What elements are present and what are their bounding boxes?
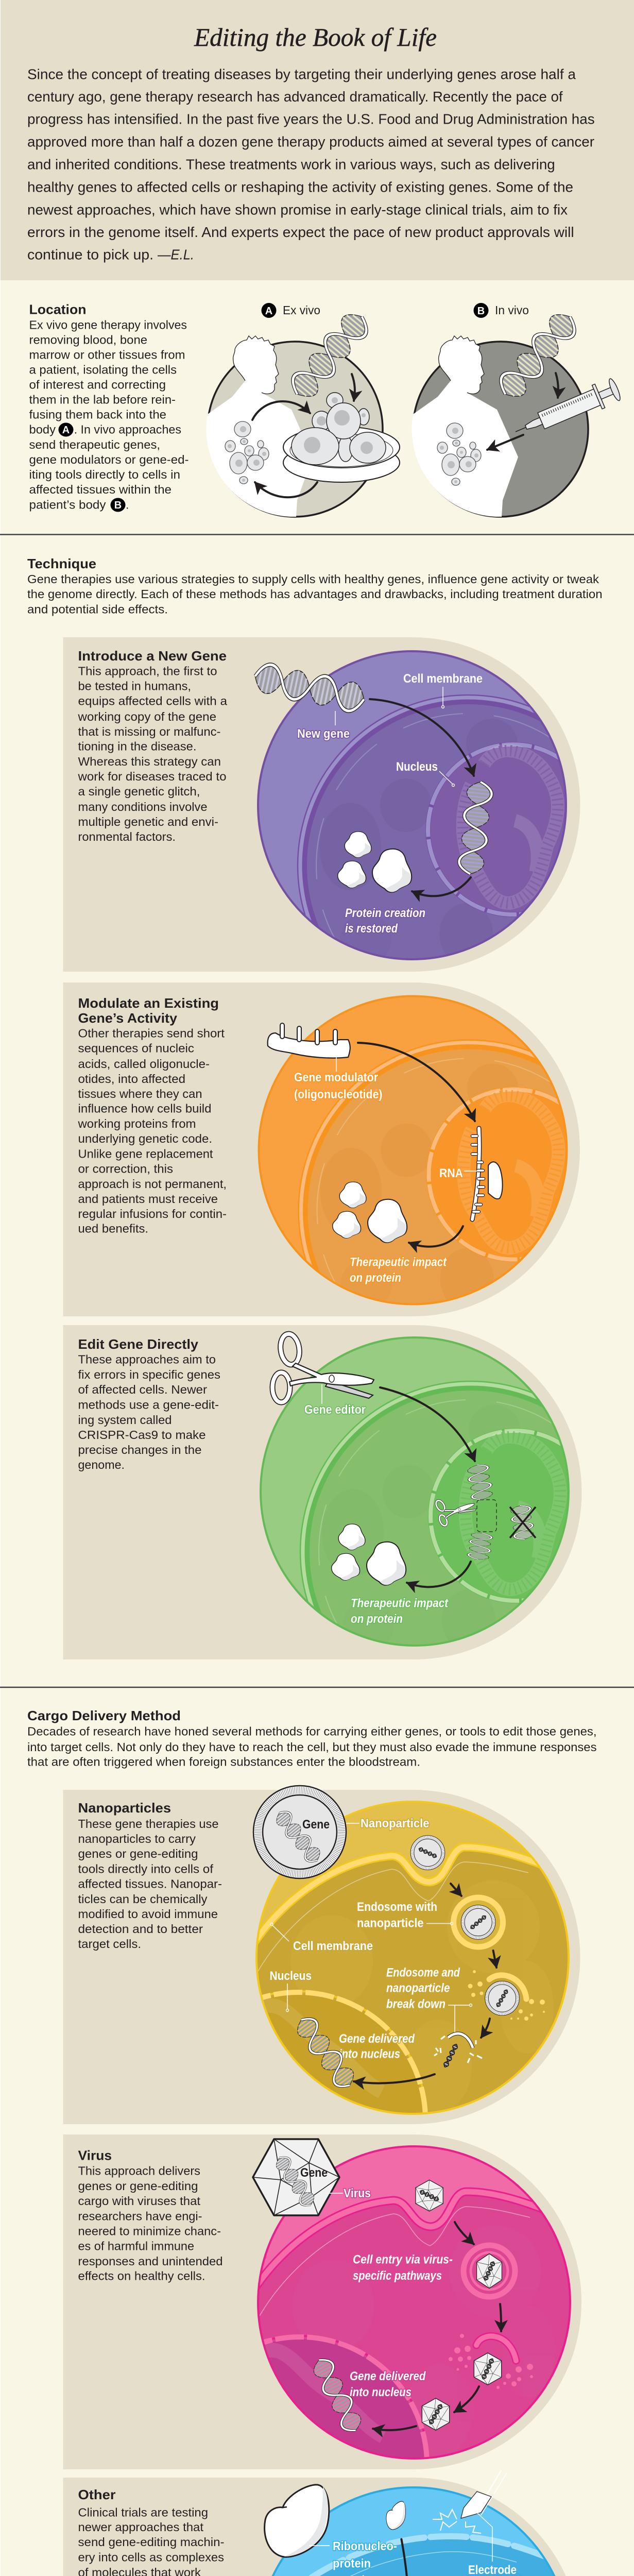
panel: edit gene directly (63, 1325, 634, 1722)
icon: petri dish with cells (283, 393, 400, 482)
body text (78, 1353, 220, 1471)
heading: Edit Gene Directly (78, 1336, 199, 1352)
label: new gene: New gene (297, 727, 350, 741)
body text: ued benefits. (78, 1222, 148, 1235)
text: technique intro: and potential side effects. (27, 603, 168, 616)
icon: proteins (338, 832, 412, 892)
label: gene editor (304, 1384, 366, 1417)
label: ex vivo (262, 303, 320, 318)
cell diagram (259, 996, 634, 1381)
heading: Other (78, 2487, 115, 2502)
text: location description: iting tools directly to cells in (29, 468, 180, 481)
text: location description: body (29, 422, 56, 436)
body text: working copy of the gene (77, 710, 216, 723)
icon: nanoparticle with gene: Gene (302, 1818, 330, 1832)
label: virus (325, 2187, 371, 2200)
label: gene delivered: into nucleus (339, 2047, 400, 2061)
icon: ribonucleoprotein complex (265, 2485, 329, 2557)
label: electrode (468, 2513, 517, 2576)
text: location description: gene modulators or gene-ed- (29, 453, 189, 466)
heading (78, 995, 219, 1026)
text: location description: patient’s body (29, 498, 106, 511)
body text: be tested in humans, (78, 679, 191, 692)
label: in vivo: B (477, 306, 485, 317)
heading: Modulate an Existing (78, 995, 219, 1011)
text: location description: fusing them back into the (29, 408, 166, 421)
heading: Introduce a New Gene (78, 648, 227, 664)
arrow: endosome down (500, 2304, 501, 2331)
body text: newer approaches that (78, 2520, 204, 2534)
body text: influence how cells build (78, 1101, 211, 1115)
icon: virus with gene (253, 2139, 339, 2215)
cell diagram (170, 1786, 582, 2248)
body text: es of harmful immune (78, 2239, 194, 2252)
label: rna (439, 1166, 478, 1180)
body text: Other therapies send short (78, 1026, 225, 1040)
label: therapeutic impact (351, 1596, 449, 1626)
icon: small scissors (432, 1487, 478, 1527)
body text (78, 2506, 225, 2576)
icon: electrode (433, 2470, 507, 2533)
body text: target cells. (78, 1937, 141, 1951)
label: cell membrane: Cell membrane (403, 672, 483, 686)
body text (77, 1026, 227, 1235)
body text: fix errors in specific genes (78, 1368, 220, 1381)
body text: that is missing or malfunc- (78, 725, 220, 738)
body text: Whereas this strategy can (78, 755, 221, 768)
body text: genome. (78, 1458, 125, 1471)
body text: affected tissues. Nanopar- (78, 1877, 222, 1891)
illustration: ex vivo (206, 308, 400, 517)
body text: detection and to better (78, 1922, 203, 1936)
label: therapeutic impact: Therapeutic impact (351, 1596, 449, 1611)
body text: methods use a gene-edit- (78, 1398, 219, 1412)
body text: researchers have engi- (78, 2209, 202, 2223)
label: new gene (297, 711, 350, 741)
label: gene editor: Gene editor (304, 1403, 366, 1417)
arrow: entering (455, 2222, 474, 2244)
body text: approach is not permanent, (78, 1177, 227, 1191)
intro text: continue to pick up. (27, 246, 153, 263)
icon: gene being edited (467, 1463, 496, 1561)
label: therapeutic impact (350, 1255, 447, 1285)
label: nanoparticle: Nanoparticle (361, 1817, 430, 1831)
intro text: —E.L. (157, 246, 194, 263)
intro text: Since the concept of treating diseases by targeting their underlying genes arose half a (27, 66, 576, 82)
label: ex vivo: A (265, 306, 272, 317)
icon: gene in nucleus (310, 2355, 365, 2435)
text: cargo intro: that are often triggered when foreign substances enter the bloodstream. (27, 1755, 420, 1768)
label: cell entry: Cell entry via virus- (353, 2252, 453, 2267)
illustration: in vivo (412, 308, 623, 517)
label: rnp: Ribonucleo- (333, 2539, 397, 2553)
body text: neered to minimize chanc- (78, 2225, 221, 2238)
icon: gene editor scissors (272, 1333, 374, 1402)
body text: ronmental factors. (78, 830, 176, 843)
body text: Clinical trials are testing (78, 2506, 208, 2519)
panel: location (29, 302, 623, 517)
heading: Nanoparticles (78, 1800, 171, 1816)
label: endosome and nanoparticle break down (386, 1966, 472, 2032)
icon: released gene (434, 2033, 482, 2068)
label: endosome and nanoparticle break down: nanoparticle (386, 1981, 450, 1995)
title: Editing the Book of Life (194, 23, 437, 52)
label: protein creation: is restored (345, 922, 398, 936)
divider (0, 534, 634, 535)
label: therapeutic impact: on protein (351, 1612, 403, 1626)
label: rna: RNA (439, 1166, 463, 1180)
text: location description: . (126, 498, 129, 511)
body text: ing system called (78, 1413, 172, 1427)
label: endosome with nanoparticle: Endosome with (357, 1900, 437, 1914)
intro text: newest approaches, which have shown promise in early-stage clinical trials, aim to fix (27, 202, 568, 217)
label: gene modulator: (oligonucleotide) (294, 1088, 382, 1101)
label: rnp: protein (333, 2556, 371, 2571)
panel: virus (63, 2134, 584, 2576)
panel: nanoparticles (63, 1786, 582, 2248)
panel: other (63, 2470, 584, 2576)
text: location description: affected tissues within the (29, 483, 172, 496)
text: location description: a patient, isolating the cells (29, 363, 177, 376)
label: in vivo (474, 303, 529, 318)
label: cell membrane: Cell membrane (293, 1939, 373, 1953)
icon: rna with modulator (472, 1128, 503, 1219)
label: cell entry: specific pathways (353, 2269, 442, 2283)
arrow: into nucleus (373, 2426, 416, 2430)
label: virus: Virus (344, 2187, 371, 2200)
body text: ticles can be chemically (78, 1892, 208, 1906)
body text: many conditions involve (78, 800, 207, 814)
intro text: errors in the genome itself. And experts expect the pace of new product approvals will (27, 224, 574, 240)
text: cargo intro (27, 1725, 596, 1768)
intro text: century ago, gene therapy research has advanced dramatically. Recently the pace of (27, 89, 563, 105)
icon: removed gene (510, 1504, 536, 1540)
label: nucleus (270, 1969, 312, 2011)
arrow: to protein (409, 1226, 463, 1247)
label: gene modulator: Gene modulator (294, 1071, 378, 1084)
body text: Unlike gene replacement (78, 1147, 213, 1160)
arrow: dna to syringe (556, 373, 558, 398)
section: technique (27, 556, 603, 616)
icon: small rnp outside (386, 2501, 406, 2530)
body text: work for diseases traced to (77, 770, 226, 783)
body text (77, 665, 227, 843)
body text: These approaches aim to (78, 1353, 216, 1366)
heading: cargo delivery method: Cargo Delivery Method (27, 1708, 181, 1723)
icon: proteins (333, 1182, 407, 1243)
body text: ery into cells as complexes (78, 2550, 224, 2564)
label: therapeutic impact: on protein (350, 1271, 401, 1285)
text: location description: Ex vivo gene therapy involves (29, 318, 187, 332)
label: nucleus: Nucleus (270, 1969, 312, 1983)
label: cell entry (353, 2252, 453, 2283)
arrow: entering (451, 1884, 461, 1896)
cell diagram (264, 2470, 555, 2576)
body text (78, 1817, 222, 1951)
icon: endosome with nanoparticle (454, 1897, 503, 1947)
body text: These gene therapies use (78, 1817, 218, 1831)
header panel (1, 0, 634, 280)
label: gene delivered (339, 2032, 415, 2061)
heading: technique: Technique (27, 556, 96, 571)
body text: modified to avoid immune (78, 1907, 218, 1921)
icon: gene modulator (268, 1023, 350, 1058)
text: location description: them in the lab before rein- (29, 393, 176, 406)
heading: Virus (78, 2147, 112, 2163)
label: gene delivered: Gene delivered (350, 2369, 426, 2383)
arrow: into nucleus (354, 2074, 435, 2083)
icon: gene in nucleus (293, 2013, 358, 2092)
body text: genes or gene-editing (78, 2179, 198, 2193)
text: location description: B (114, 500, 122, 511)
arrow: into nucleus (370, 699, 474, 776)
arrow: injection (487, 435, 523, 450)
icon: syringe (510, 377, 623, 444)
arrow: breakdown down (481, 2019, 490, 2038)
intro text: healthy genes to affected cells or reshaping the activity of existing genes. Some of the (27, 179, 573, 195)
arrow: breakdown down (454, 2386, 479, 2412)
body text: otides, into affected (78, 1072, 185, 1086)
icon: endosome breaking down (449, 2334, 533, 2389)
body text: responses and unintended (78, 2255, 222, 2268)
cell diagram (261, 1333, 634, 1722)
icon: new gene (252, 662, 367, 714)
label: protein creation (345, 906, 425, 936)
cell diagram (252, 651, 634, 1036)
body text: CRISPR-Cas9 to make (78, 1428, 206, 1442)
text: technique intro: the genome directly. Each of these methods has advantages and drawbacks, including treatment duration (27, 587, 603, 601)
icon: dna strand (286, 308, 373, 403)
section: cargo delivery method (27, 1708, 596, 1768)
body text: or correction, this (78, 1162, 173, 1176)
body text: underlying genetic code. (78, 1132, 212, 1145)
label: protein creation: Protein creation (345, 906, 425, 920)
divider (0, 1687, 634, 1688)
text: technique intro: Gene therapies use various strategies to supply cells with healthy genes, influence gene activity or tweak (27, 572, 599, 586)
label: gene delivered: Gene delivered (339, 2032, 415, 2046)
label: gene delivered (350, 2369, 426, 2399)
arrow: into nucleus (358, 1043, 475, 1121)
label: endosome and nanoparticle break down: Endosome and (386, 1966, 460, 1979)
icon: endosome with virus (464, 2245, 515, 2297)
label: endosome and nanoparticle break down: break down (386, 1997, 445, 2011)
arrow: endosome down (493, 1951, 496, 1968)
text: location description: A (62, 425, 70, 436)
body text: tissues where they can (78, 1087, 202, 1100)
text: location description: send therapeutic genes, (29, 438, 160, 451)
label: endosome with nanoparticle (357, 1900, 453, 1930)
body text: a single genetic glitch, (78, 785, 200, 798)
body text: precise changes in the (78, 1443, 202, 1456)
body text (78, 2164, 222, 2282)
body text: This approach, the first to (78, 665, 217, 678)
body text: cargo with viruses that (78, 2194, 201, 2208)
label: ex vivo: Ex vivo (283, 303, 320, 317)
body text: and patients must receive (78, 1192, 218, 1206)
body text: multiple genetic and envi- (78, 815, 218, 828)
label: nucleus: Nucleus (396, 760, 438, 774)
body text: genes or gene-editing (78, 1847, 198, 1860)
text: location description: of interest and correcting (29, 378, 166, 392)
label: gene delivered: into nucleus (350, 2385, 412, 2399)
icon: gene in nucleus (458, 781, 493, 875)
text: technique intro (27, 572, 603, 616)
icon: virus with gene: Gene (300, 2166, 328, 2180)
icon: endosome breaking down (468, 1970, 545, 2021)
body text: tools directly into cells of (78, 1862, 214, 1875)
label: gene modulator (294, 1056, 382, 1101)
icon: dna strand (494, 308, 581, 403)
label: endosome with nanoparticle: nanoparticle (357, 1917, 423, 1930)
text: location description: marrow or other tissues from (29, 348, 185, 362)
label: rnp (309, 2539, 397, 2576)
icon: virus entering (416, 2180, 443, 2211)
body text: send gene-editing machin- (78, 2535, 225, 2549)
body text: of affected cells. Newer (78, 1383, 207, 1396)
label: cell membrane (270, 1923, 373, 1953)
panel: introduce a new gene (63, 637, 634, 1036)
icon: nanoparticle with gene (253, 1786, 346, 1878)
icon: proteins (332, 1524, 406, 1585)
arrow: dish to body (255, 482, 317, 497)
arrow: to protein (412, 877, 471, 896)
body text: This approach delivers (78, 2164, 200, 2177)
icon: nanoparticle entering (410, 1836, 445, 1870)
icon: virus at nucleus (422, 2398, 450, 2430)
label: in vivo: In vivo (495, 303, 529, 317)
body text: effects on healthy cells. (78, 2269, 205, 2282)
body text: tioning in the disease. (78, 740, 197, 753)
arrow: dna to dish (352, 374, 355, 401)
text: cargo intro: Decades of research have honed several methods for carrying either genes, or tools to edit those genes, (27, 1725, 596, 1738)
intro text: and inherited conditions. These treatments work in various ways, such as delivering (27, 157, 555, 172)
heading: Gene’s Activity (78, 1010, 178, 1026)
label: therapeutic impact: Therapeutic impact (350, 1255, 447, 1269)
heading: location: Location (29, 302, 87, 317)
text: location description: removing blood, bone (29, 333, 147, 346)
body text: nanoparticles to carry (78, 1832, 196, 1845)
label: nucleus (396, 760, 454, 786)
text: location description (29, 318, 189, 512)
panel: modulate an existing gene's activity (63, 982, 634, 1381)
body text: equips affected cells with a (78, 694, 227, 708)
arrow: body to dish (252, 401, 310, 420)
text: location description: . In vivo approaches (74, 422, 181, 436)
cell diagram (172, 2139, 584, 2576)
arrow: into nucleus (380, 1387, 475, 1461)
body text: acids, called oligonucle- (78, 1057, 210, 1071)
body text: working proteins from (77, 1117, 196, 1130)
intro text: progress has intensified. In the past five years the U.S. Food and Drug Administration has (27, 111, 595, 127)
label: cell membrane (403, 672, 483, 708)
arrow: rnp enters (401, 2539, 409, 2576)
text: cargo intro: into target cells. Not only do they have to reach the cell, but they must also evade the immune responses (27, 1740, 596, 1754)
intro text: approved more than half a dozen gene therapy products aimed at several types of cancer (27, 134, 594, 149)
intro text (27, 66, 595, 263)
body text: sequences of nucleic (78, 1042, 194, 1055)
arrow: to protein (407, 1562, 471, 1587)
body text: regular infusions for contin- (78, 1207, 227, 1221)
